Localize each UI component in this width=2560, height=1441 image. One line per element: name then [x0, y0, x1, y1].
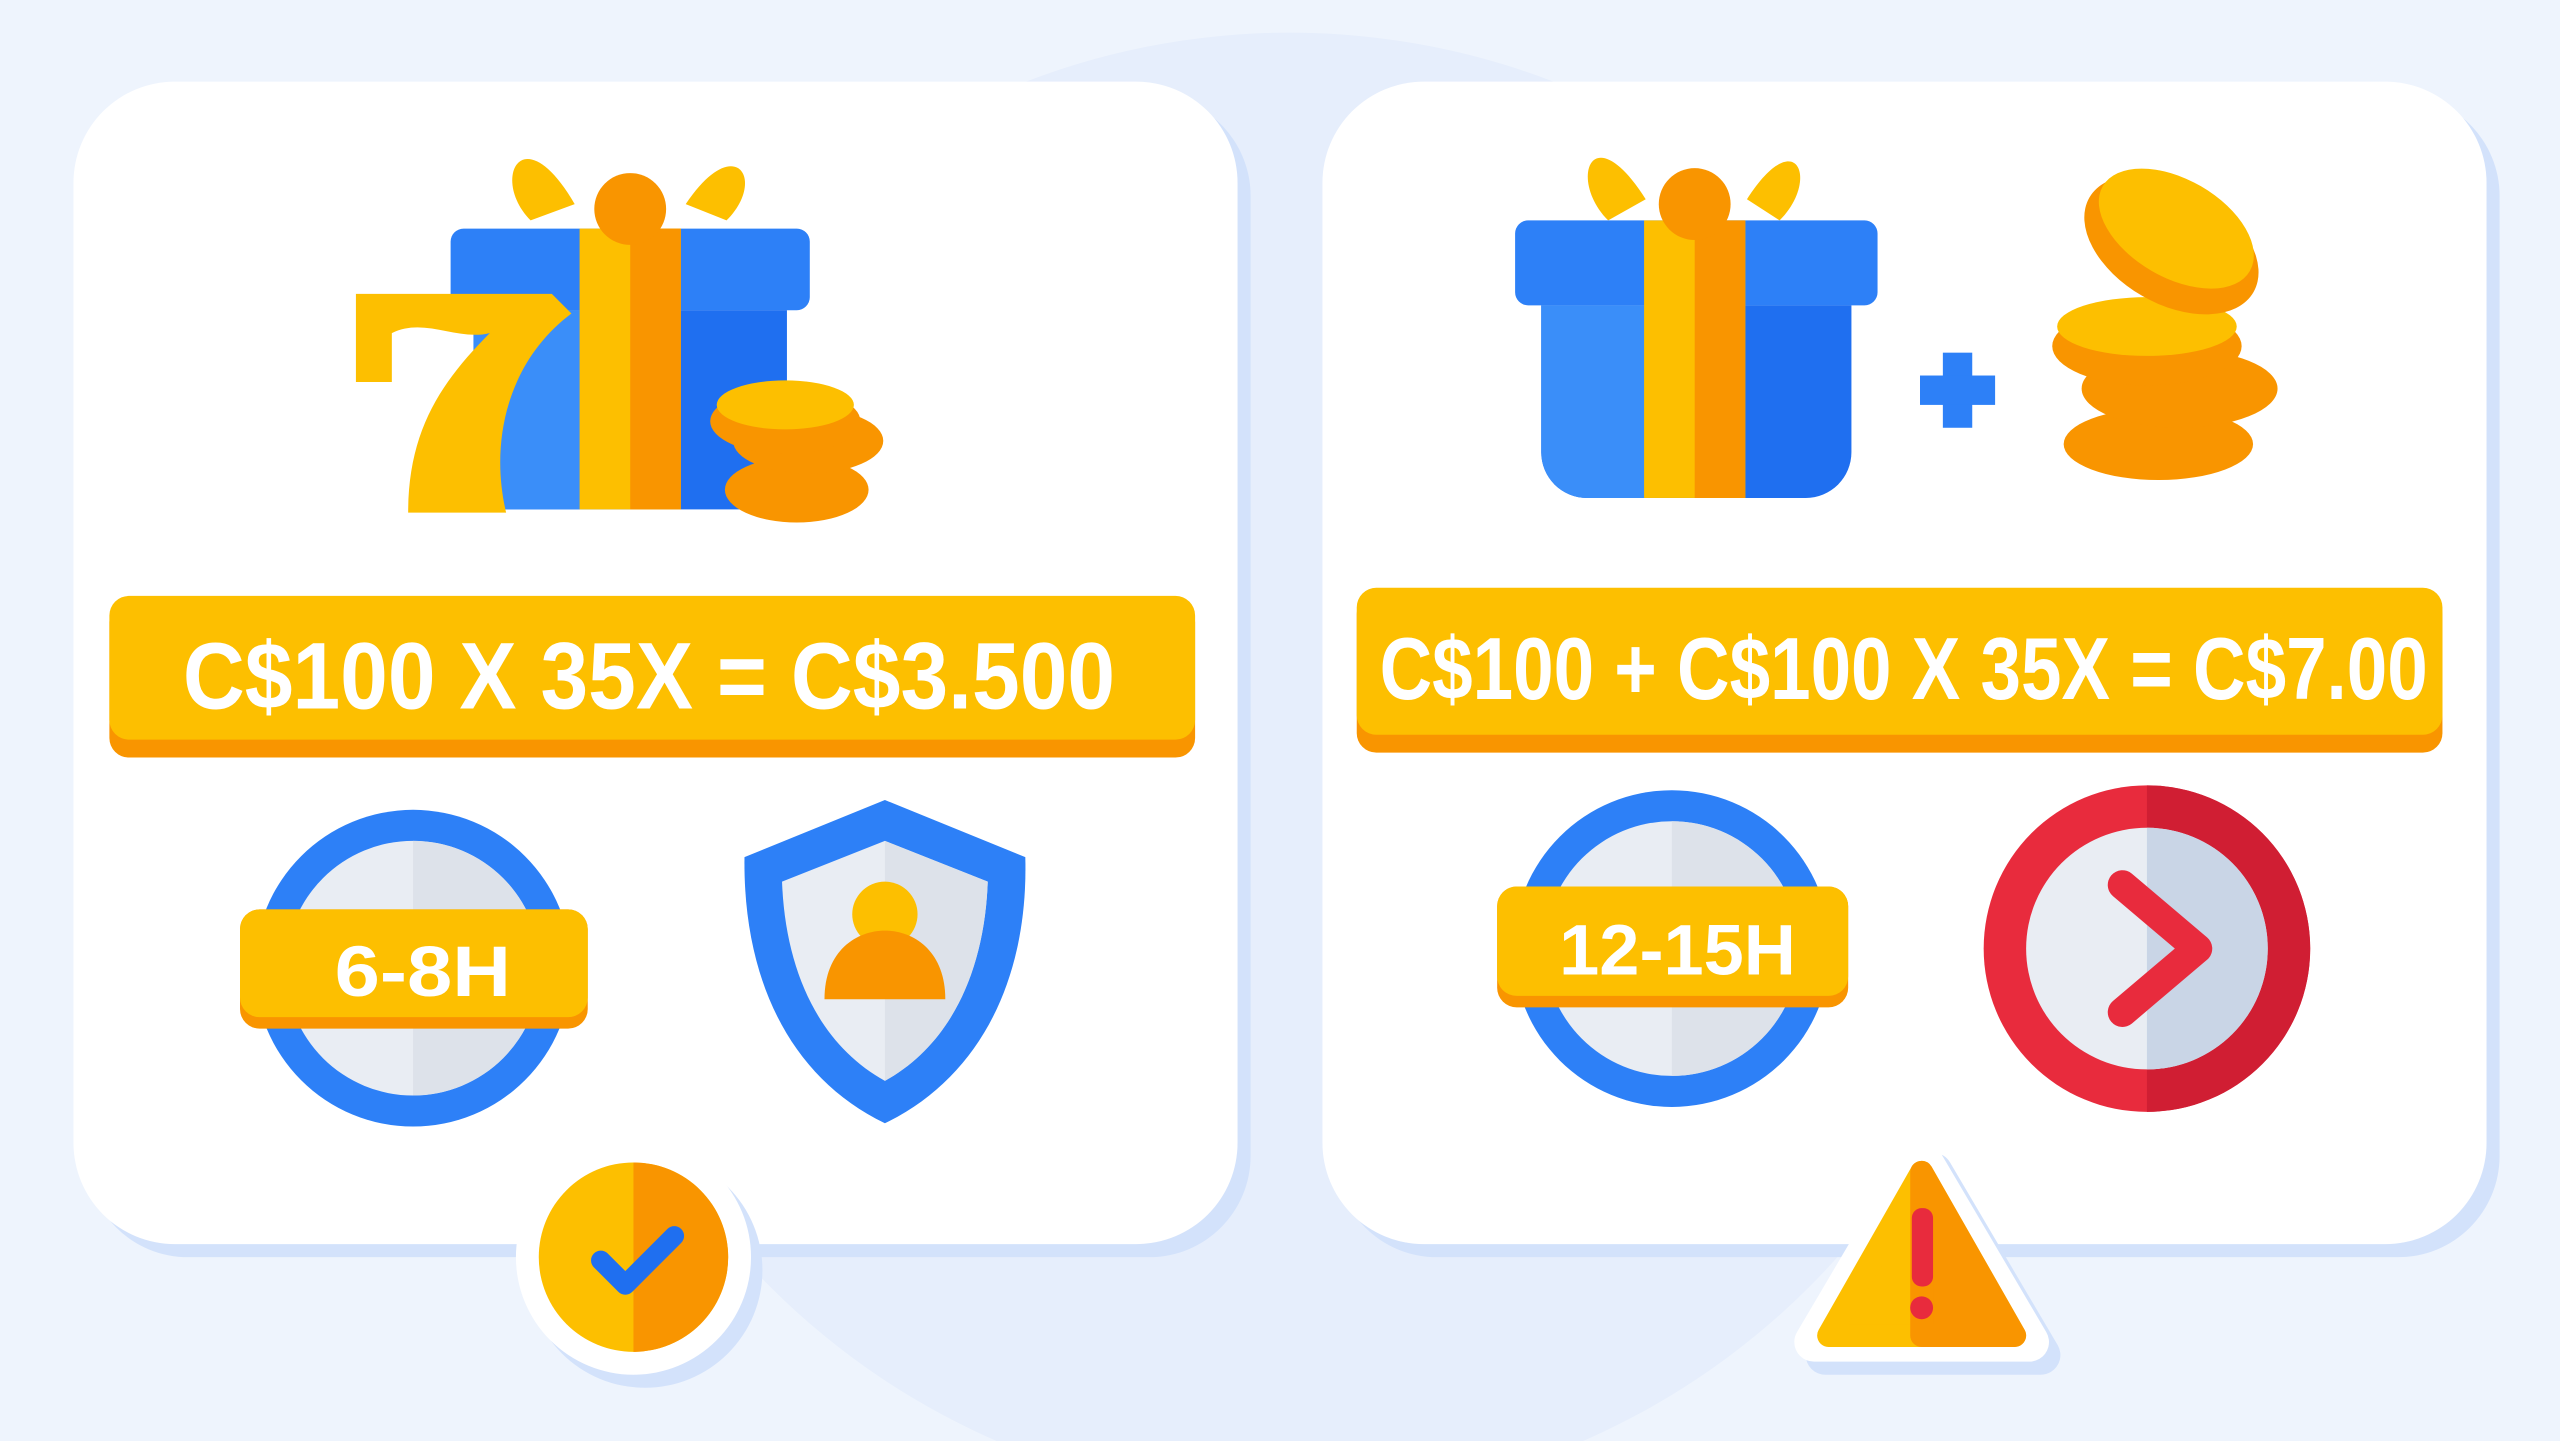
formula bar left: [109, 596, 1195, 758]
icon: gift with seven and coins: [356, 159, 883, 522]
panel: left card: [73, 82, 1251, 1388]
formula bar left: C$100 X 35X = C$3.500: [183, 624, 1115, 730]
icon: gift: [1515, 158, 1878, 498]
panel: right card: [1322, 82, 2500, 1355]
icon: clock 6-8H: [240, 810, 588, 1127]
icon: clock 12-15H: [1497, 790, 1848, 1107]
icon: check badge: [516, 1140, 762, 1388]
icon: warning triangle: [1814, 1159, 2041, 1355]
icon: clock 12-15H: 12-15H: [1559, 911, 1796, 991]
icon: red clock arrow: [1984, 785, 2310, 1112]
icon: shield user: [744, 800, 1025, 1123]
icon: plus: [1920, 353, 1995, 428]
icon: coins stack: [2052, 144, 2283, 480]
icon: clock 6-8H: 6-8H: [335, 932, 511, 1012]
formula bar right: [1357, 588, 2442, 753]
